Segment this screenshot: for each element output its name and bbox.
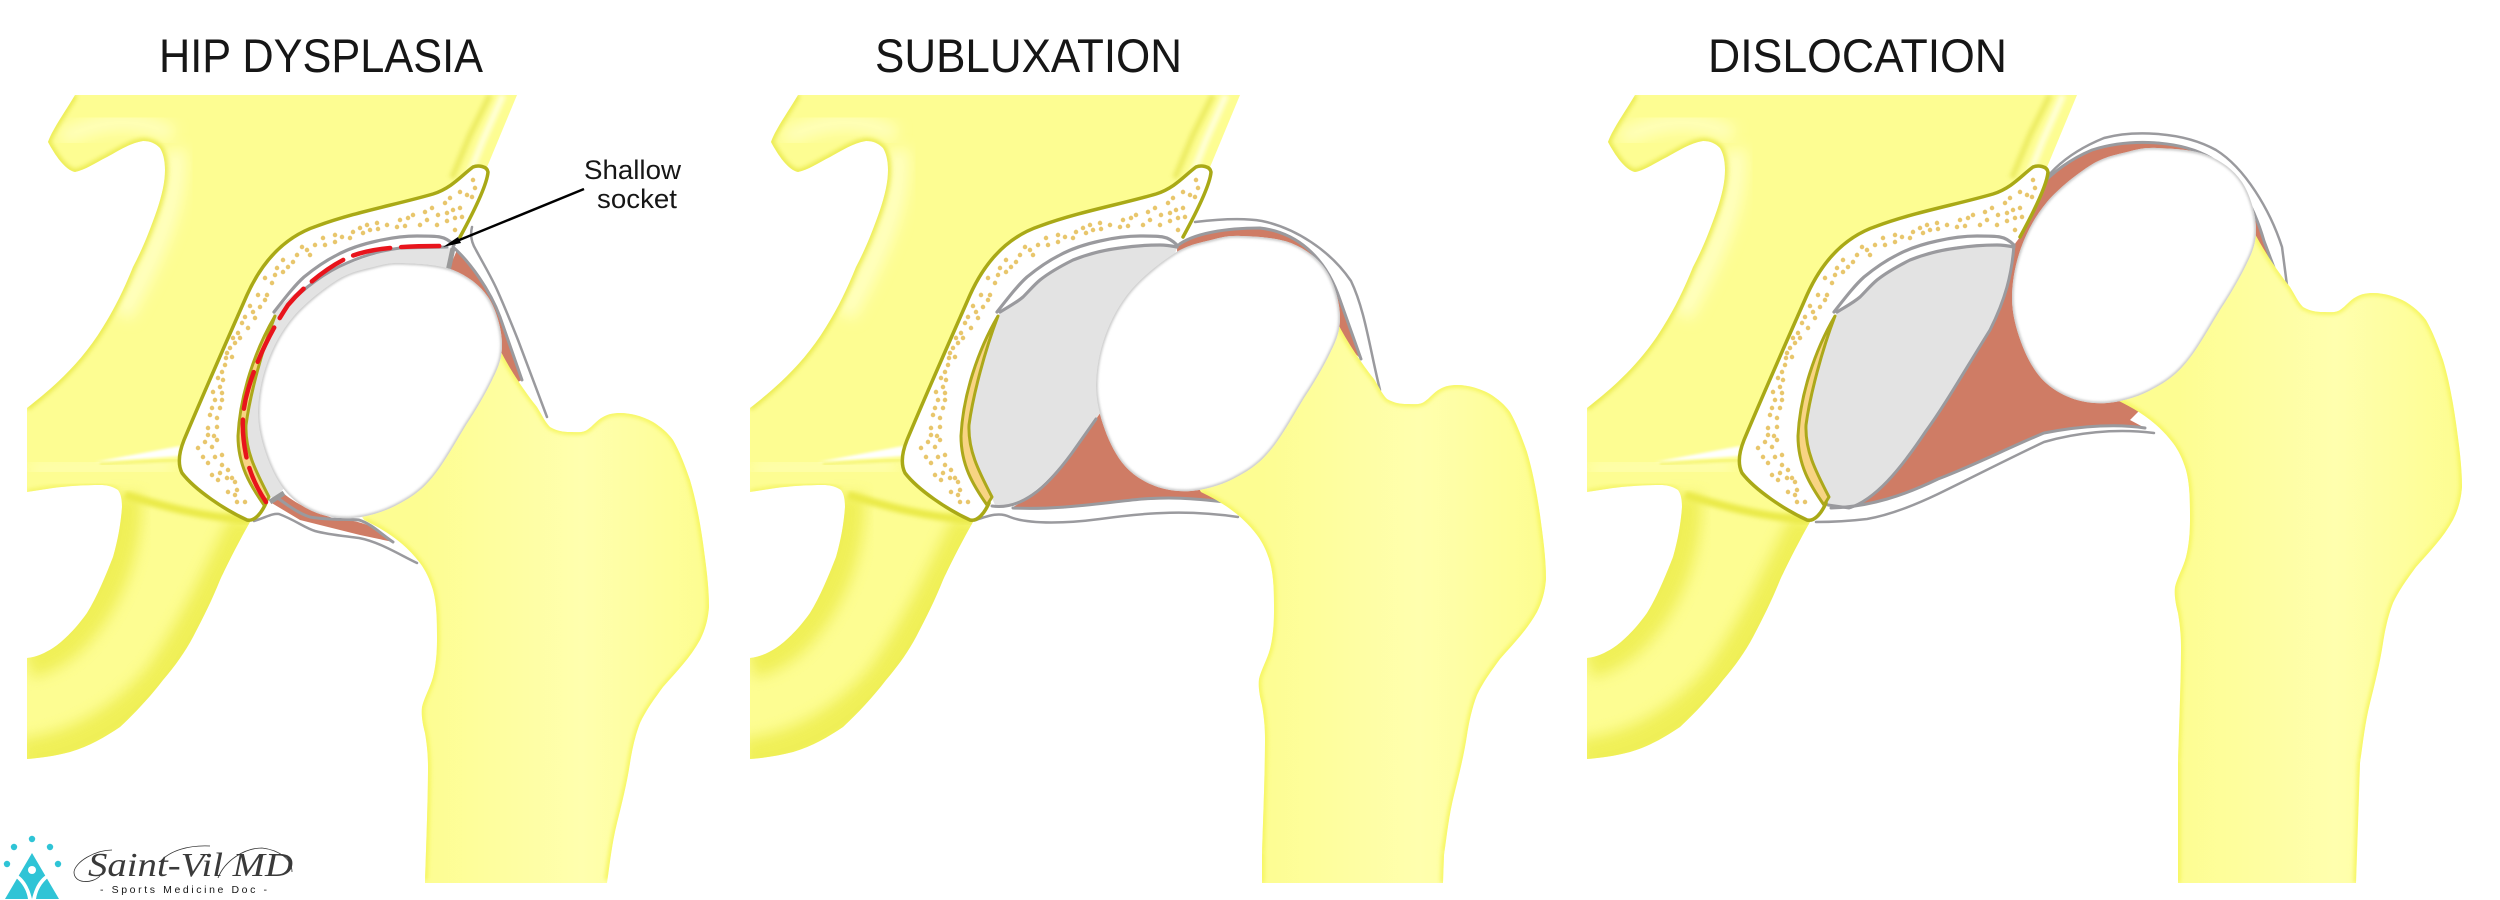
panel: subluxation bbox=[743, 29, 1546, 883]
panel: dislocation bbox=[1580, 29, 2462, 883]
callout: shallow socket: socket bbox=[597, 184, 677, 214]
red dashed line: shallow socket bbox=[243, 246, 440, 502]
arrow: pointer to socket bbox=[443, 189, 584, 247]
callout: shallow socket: Shallow bbox=[584, 155, 682, 185]
title: subluxation: SUBLUXATION bbox=[875, 29, 1182, 82]
acetabulum bone and cartilage bbox=[179, 166, 488, 520]
femoral head bbox=[2012, 148, 2256, 403]
panel: hip dysplasia bbox=[20, 29, 709, 883]
femoral head bbox=[258, 263, 502, 518]
socket, ligament and capsule bbox=[969, 219, 1380, 523]
pelvis bone bbox=[743, 95, 1240, 759]
femoral head bbox=[1096, 236, 1340, 491]
pelvis bone bbox=[20, 95, 517, 759]
icon: teal figure bbox=[4, 836, 61, 899]
logo: Saint-Vil MD bbox=[4, 836, 294, 899]
title: hip dysplasia: HIP DYSPLASIA bbox=[159, 29, 484, 82]
socket and capsule bbox=[240, 227, 547, 563]
wordmark: Saint-Vil MD bbox=[88, 847, 294, 884]
pelvis bone bbox=[1580, 95, 2077, 759]
acetabulum bone and cartilage bbox=[1739, 166, 2048, 520]
socket, ligament and capsule bbox=[1805, 133, 2288, 522]
femur bbox=[2093, 230, 2462, 883]
tagline: - Sports Medicine Doc - bbox=[100, 884, 268, 896]
title: dislocation: DISLOCATION bbox=[1708, 29, 2007, 82]
callout: shallow socket bbox=[584, 155, 682, 214]
femur bbox=[340, 350, 709, 883]
femur bbox=[1177, 322, 1546, 883]
acetabulum bone and cartilage bbox=[902, 166, 1211, 520]
